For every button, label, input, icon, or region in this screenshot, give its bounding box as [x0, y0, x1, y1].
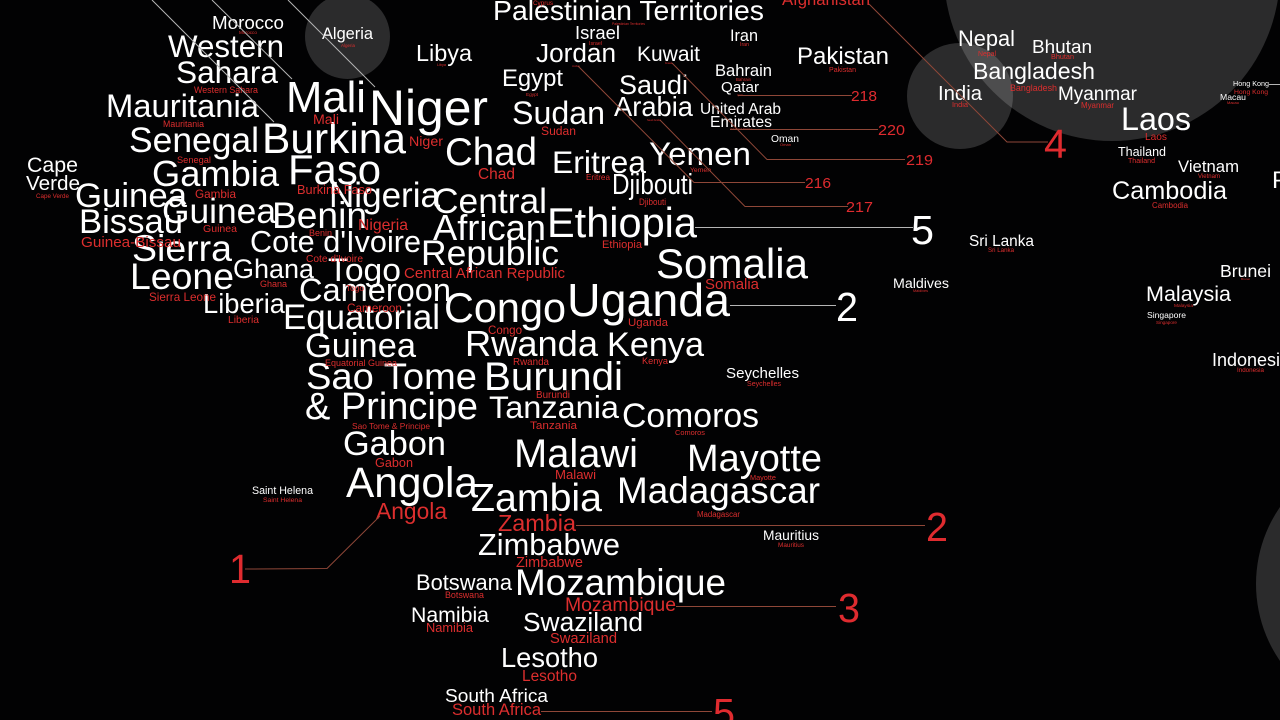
name: Uganda: Uganda	[567, 274, 730, 326]
line: Zambia to 2	[576, 524, 925, 526]
sublabel: Cote d'Ivoire: Cote d'Ivoire	[306, 254, 363, 265]
name: Guinea (Equatorial): Guinea	[305, 327, 417, 365]
sublabel: Qatar: Qatar	[737, 94, 743, 97]
sublabel: Mauritius: Mauritius	[778, 542, 804, 549]
name: Cote d'Ivoire: Cote d'Ivoire	[250, 225, 421, 259]
sublabel: Sierra Leone: Sierra Leone	[149, 291, 216, 304]
sublabel: Saudi Arabia: Saudi Arabia	[647, 119, 662, 122]
sublabel: Malawi: Malawi	[555, 467, 596, 482]
name: Sahara: Sahara	[176, 54, 278, 90]
sublabel: Indonesia: Indonesia	[1237, 367, 1265, 374]
name: Lesotho: Lesotho	[501, 642, 598, 673]
sublabel: Iran: Iran	[740, 42, 749, 48]
line: Jordan to 216	[578, 66, 805, 182]
name: Somalia: Somalia	[656, 240, 809, 287]
sublabel: Seychelles: Seychelles	[747, 381, 781, 388]
sublabel: Singapore: Singapore	[1156, 320, 1177, 325]
sublabel: Botswana: Botswana	[445, 590, 484, 600]
name: Brunei: Brunei	[1220, 261, 1271, 281]
name: Seychelles: Seychelles	[726, 365, 799, 382]
bubble: China	[944, 0, 1280, 141]
name: Sierra: Sierra	[132, 227, 232, 269]
sublabel: United Arab Emirates: United Arab Emirates	[730, 128, 753, 131]
name: Faso: Faso	[288, 146, 381, 193]
sublabel: Algeria: Algeria	[341, 43, 355, 48]
sublabel: Jordan: Jordan	[572, 64, 581, 68]
white line 1	[152, 0, 274, 122]
name: Saint Helena: Saint Helena	[252, 485, 313, 497]
rank 4: 4	[1044, 121, 1067, 167]
rank 216: 216	[805, 175, 831, 192]
sublabel: Macau: Macau	[1227, 100, 1239, 105]
name: Yemen: Yemen	[649, 136, 751, 172]
sublabel: Madagascar: Madagascar	[697, 510, 740, 519]
sublabel: Benin: Benin	[309, 228, 332, 238]
bubbles	[305, 0, 1280, 720]
line: Mozambique to 3	[676, 606, 836, 608]
sublabel: Myanmar: Myanmar	[1081, 101, 1114, 110]
sublabel: Burkina Faso: Burkina Faso	[297, 183, 372, 197]
line: Uganda to 2	[730, 304, 836, 306]
line: Afghanistan to 4	[869, 4, 1048, 142]
name: Namibia: Namibia	[411, 603, 489, 627]
sublabel: Laos: Laos	[1145, 132, 1167, 143]
sublabel: Swaziland: Swaziland	[550, 631, 617, 647]
rank 220: 220	[878, 122, 905, 139]
sublabel: Namibia: Namibia	[426, 620, 474, 635]
name: Niger: Niger	[369, 80, 488, 136]
name: Guinea: Guinea	[162, 191, 276, 231]
sublabel: Pakistan: Pakistan	[829, 67, 856, 74]
name: Ethiopia: Ethiopia	[547, 199, 698, 246]
rank 2 white: 2	[836, 284, 858, 330]
name: Laos: Laos	[1121, 101, 1191, 137]
bubble: Algeria	[305, 0, 390, 79]
white line 2	[212, 0, 292, 79]
sublabel: Saint Helena: Saint Helena	[263, 497, 302, 504]
name: Mauritania: Mauritania	[106, 87, 260, 124]
sublabel: Eritrea: Eritrea	[586, 173, 610, 182]
name: Thailand: Thailand	[1118, 145, 1166, 159]
sublabel: Israel: Israel	[589, 41, 602, 47]
name: Eritrea: Eritrea	[552, 144, 646, 180]
sublabel: Brunei: Brunei	[1241, 277, 1250, 281]
name: Saudi: Saudi	[619, 70, 688, 100]
sublabel: Togo: Togo	[346, 284, 365, 293]
sublabel: Tanzania: Tanzania	[530, 420, 578, 432]
name: Macau: Macau	[1220, 92, 1246, 102]
name: Equatorial: Equatorial	[283, 298, 440, 337]
name: Central: Central	[433, 181, 547, 221]
sublabel: Burundi: Burundi	[536, 390, 570, 401]
sublabel: Central African Republic: Central African Republic	[404, 266, 566, 282]
name: Zambia: Zambia	[471, 476, 602, 520]
sublabel: Cyprus: Cyprus	[533, 0, 553, 7]
rank 2: 2	[926, 504, 948, 550]
sublabel: Mayotte: Mayotte	[750, 473, 776, 482]
name: Republic: Republic	[421, 233, 559, 273]
sublabel: Nigeria: Nigeria	[358, 217, 408, 234]
sublabel: Gambia: Gambia	[195, 188, 236, 201]
name: Malaysia: Malaysia	[1146, 282, 1231, 306]
name: Madagascar: Madagascar	[617, 470, 820, 511]
name: Morocco: Morocco	[212, 12, 284, 33]
sublabel: Comoros: Comoros	[675, 428, 705, 437]
sublabel: Lesotho: Lesotho	[522, 668, 577, 685]
name: Western: Western	[168, 29, 284, 64]
sublabel: Vietnam: Vietnam	[1198, 174, 1220, 180]
name: Guinea (Bissau): Guinea	[75, 177, 188, 215]
line: Qatar to 218	[738, 94, 852, 96]
line: Kuwait to 219	[672, 63, 905, 160]
name: Nepal: Nepal	[958, 26, 1015, 51]
name: Oman: Oman	[771, 134, 799, 145]
name: Angola: Angola	[346, 459, 478, 506]
sublabel: Sao Tome & Principe: Sao Tome & Principe	[352, 421, 430, 431]
sublabel: Gabon: Gabon	[375, 456, 413, 470]
sublabel: Kenya: Kenya	[642, 356, 669, 366]
name: Sudan: Sudan	[512, 95, 605, 131]
name: Libya: Libya	[416, 40, 473, 66]
bubble: lower right	[1256, 448, 1280, 720]
sublabel: South Africa: South Africa	[452, 701, 542, 719]
sublabel: Sudan: Sudan	[541, 124, 576, 138]
sublabel: Oman: Oman	[780, 142, 791, 147]
sublabel: Rwanda: Rwanda	[513, 357, 550, 368]
name: Hong Kong: Hong Kong	[1233, 79, 1269, 88]
name: Burkina: Burkina	[262, 116, 406, 163]
rank 217: 217	[846, 199, 873, 216]
sublabel: Nepal: Nepal	[978, 51, 996, 58]
line: South Africa to 5	[541, 710, 712, 712]
name: Chad: Chad	[445, 131, 537, 174]
name: Swaziland: Swaziland	[523, 607, 643, 637]
rank 219: 219	[906, 152, 933, 169]
sublabel: Mozambique: Mozambique	[565, 594, 676, 616]
line: Saudi Arabia to 217	[660, 120, 848, 206]
name: Rwanda: Rwanda	[465, 323, 599, 364]
name: Jordan: Jordan	[536, 38, 616, 68]
name: Comoros: Comoros	[622, 397, 759, 435]
name: Benin: Benin	[272, 194, 367, 236]
name: Djibouti: Djibouti	[612, 169, 693, 201]
name: Egypt: Egypt	[502, 65, 563, 92]
sublabel: India: India	[952, 100, 969, 109]
name: Burundi: Burundi	[484, 354, 623, 399]
sublabel: Egypt: Egypt	[526, 92, 539, 97]
name: Senegal: Senegal	[129, 120, 259, 160]
sublabel: Uganda: Uganda	[628, 317, 669, 329]
name: Congo: Congo	[444, 285, 566, 331]
sublabel: Hong Kong: Hong Kong	[1234, 89, 1268, 96]
sublabel: Sri Lanka: Sri Lanka	[988, 247, 1015, 254]
name: Sao Tome: Sao Tome	[306, 356, 477, 397]
rank 1: 1	[229, 546, 251, 592]
name: Mauritius: Mauritius	[763, 528, 819, 543]
name: Singapore: Singapore	[1147, 310, 1186, 320]
name: Botswana: Botswana	[416, 570, 513, 595]
name: Cambodia: Cambodia	[1112, 177, 1228, 205]
name: Pakistan: Pakistan	[797, 43, 889, 70]
sublabel: Congo: Congo	[488, 325, 522, 337]
name: Malawi: Malawi	[514, 432, 638, 476]
sublabel: Morocco: Morocco	[239, 30, 257, 35]
sublabel: Thailand: Thailand	[1128, 158, 1155, 165]
line: Hong Kong	[1269, 84, 1280, 86]
name: Algeria: Algeria	[322, 25, 374, 43]
sublabel: Yemen: Yemen	[690, 167, 711, 174]
sublabel: Western Sahara: Western Sahara	[194, 85, 258, 95]
name: Mozambique: Mozambique	[515, 562, 726, 603]
name: Bhutan: Bhutan	[1032, 37, 1092, 58]
line: Angola to 1	[245, 516, 380, 569]
sublabel: Liberia: Liberia	[228, 315, 259, 326]
bubble: India	[907, 43, 1013, 149]
name: Nigeria: Nigeria	[329, 176, 441, 215]
sublabel: Palestinian Territories: Palestinian Territories	[612, 22, 645, 26]
sublabel: Bahrain: Bahrain	[736, 77, 752, 82]
rank 218: 218	[851, 88, 877, 105]
sublabel: Kuwait: Kuwait	[665, 62, 672, 65]
name: Iran: Iran	[730, 27, 758, 45]
sublabel: Zimbabwe: Zimbabwe	[516, 555, 583, 571]
sublabel: Niger: Niger	[409, 134, 443, 150]
sublabel: Cambodia: Cambodia	[1152, 201, 1189, 210]
rank 3: 3	[838, 585, 860, 631]
sublabel: Senegal: Senegal	[177, 155, 211, 165]
name: Myanmar: Myanmar	[1058, 84, 1138, 105]
name: South Africa: South Africa	[445, 686, 548, 707]
sublabel: Guinea: Guinea	[203, 223, 237, 235]
name: Verde: Verde	[26, 173, 80, 195]
sublabel: Mauritania: Mauritania	[163, 119, 204, 129]
name: Arabia: Arabia	[614, 91, 694, 122]
name: & Principe: & Principe	[305, 386, 478, 428]
name: Sri Lanka: Sri Lanka	[969, 233, 1034, 250]
name: Gabon: Gabon	[343, 425, 446, 463]
name: African: African	[433, 207, 546, 248]
line: Ethiopia to 5	[695, 226, 913, 228]
name: Bahrain: Bahrain	[715, 62, 772, 80]
sublabel: Mali: Mali	[313, 112, 339, 128]
rank 5 white: 5	[911, 207, 934, 253]
sublabel: Zambia: Zambia	[498, 510, 577, 536]
name: Liberia: Liberia	[203, 288, 286, 319]
name: Qatar: Qatar	[721, 79, 759, 96]
rank numbers	[229, 88, 1067, 720]
name: Kuwait: Kuwait	[637, 43, 700, 66]
sublabel: Somalia: Somalia	[705, 276, 760, 293]
line: UAE to 220	[730, 128, 878, 130]
sublabel: Ethiopia: Ethiopia	[602, 239, 643, 251]
name: Vietnam: Vietnam	[1178, 157, 1239, 176]
sublabel: Ghana: Ghana	[260, 279, 287, 289]
name: Ghana: Ghana	[233, 254, 315, 284]
name: India: India	[938, 83, 983, 105]
sublabel: Maldives: Maldives	[913, 289, 928, 293]
name: Israel: Israel	[575, 22, 620, 43]
name: Kenya: Kenya	[607, 326, 705, 364]
name: Mayotte: Mayotte	[687, 438, 822, 480]
name: Bissau: Bissau	[79, 203, 183, 241]
sublabel: Chad: Chad	[478, 166, 515, 183]
name: Mali: Mali	[286, 74, 366, 122]
sublabel: Libya: Libya	[437, 63, 447, 67]
sublabel: Cameroon: Cameroon	[347, 301, 402, 315]
sublabel: Malaysia: Malaysia	[1174, 303, 1193, 309]
name: Gambia: Gambia	[152, 153, 280, 194]
sublabel: Guinea-Bissau: Guinea-Bissau	[81, 234, 181, 251]
name: United Arab: United Arab	[700, 101, 781, 118]
sublabel: Bangladesh: Bangladesh	[1010, 83, 1057, 93]
sublabel: Cape Verde: Cape Verde	[36, 193, 70, 200]
name: Bangladesh: Bangladesh	[973, 58, 1095, 84]
name: Cape: Cape	[27, 153, 78, 177]
name: Tanzania: Tanzania	[489, 389, 619, 425]
sublabel: Angola: Angola	[376, 498, 447, 524]
name: Togo: Togo	[328, 252, 401, 288]
sublabel: Equatorial Guinea: Equatorial Guinea	[325, 358, 397, 368]
sublabel: Bhutan: Bhutan	[1051, 52, 1074, 61]
name: Zimbabwe: Zimbabwe	[478, 527, 620, 562]
name: Leone: Leone	[130, 255, 234, 297]
sublabel: Djibouti: Djibouti	[639, 197, 666, 208]
white line 3	[288, 0, 375, 87]
name: Emirates: Emirates	[710, 114, 772, 131]
name: Maldives: Maldives	[893, 276, 949, 292]
name: Cameroon: Cameroon	[299, 271, 451, 308]
